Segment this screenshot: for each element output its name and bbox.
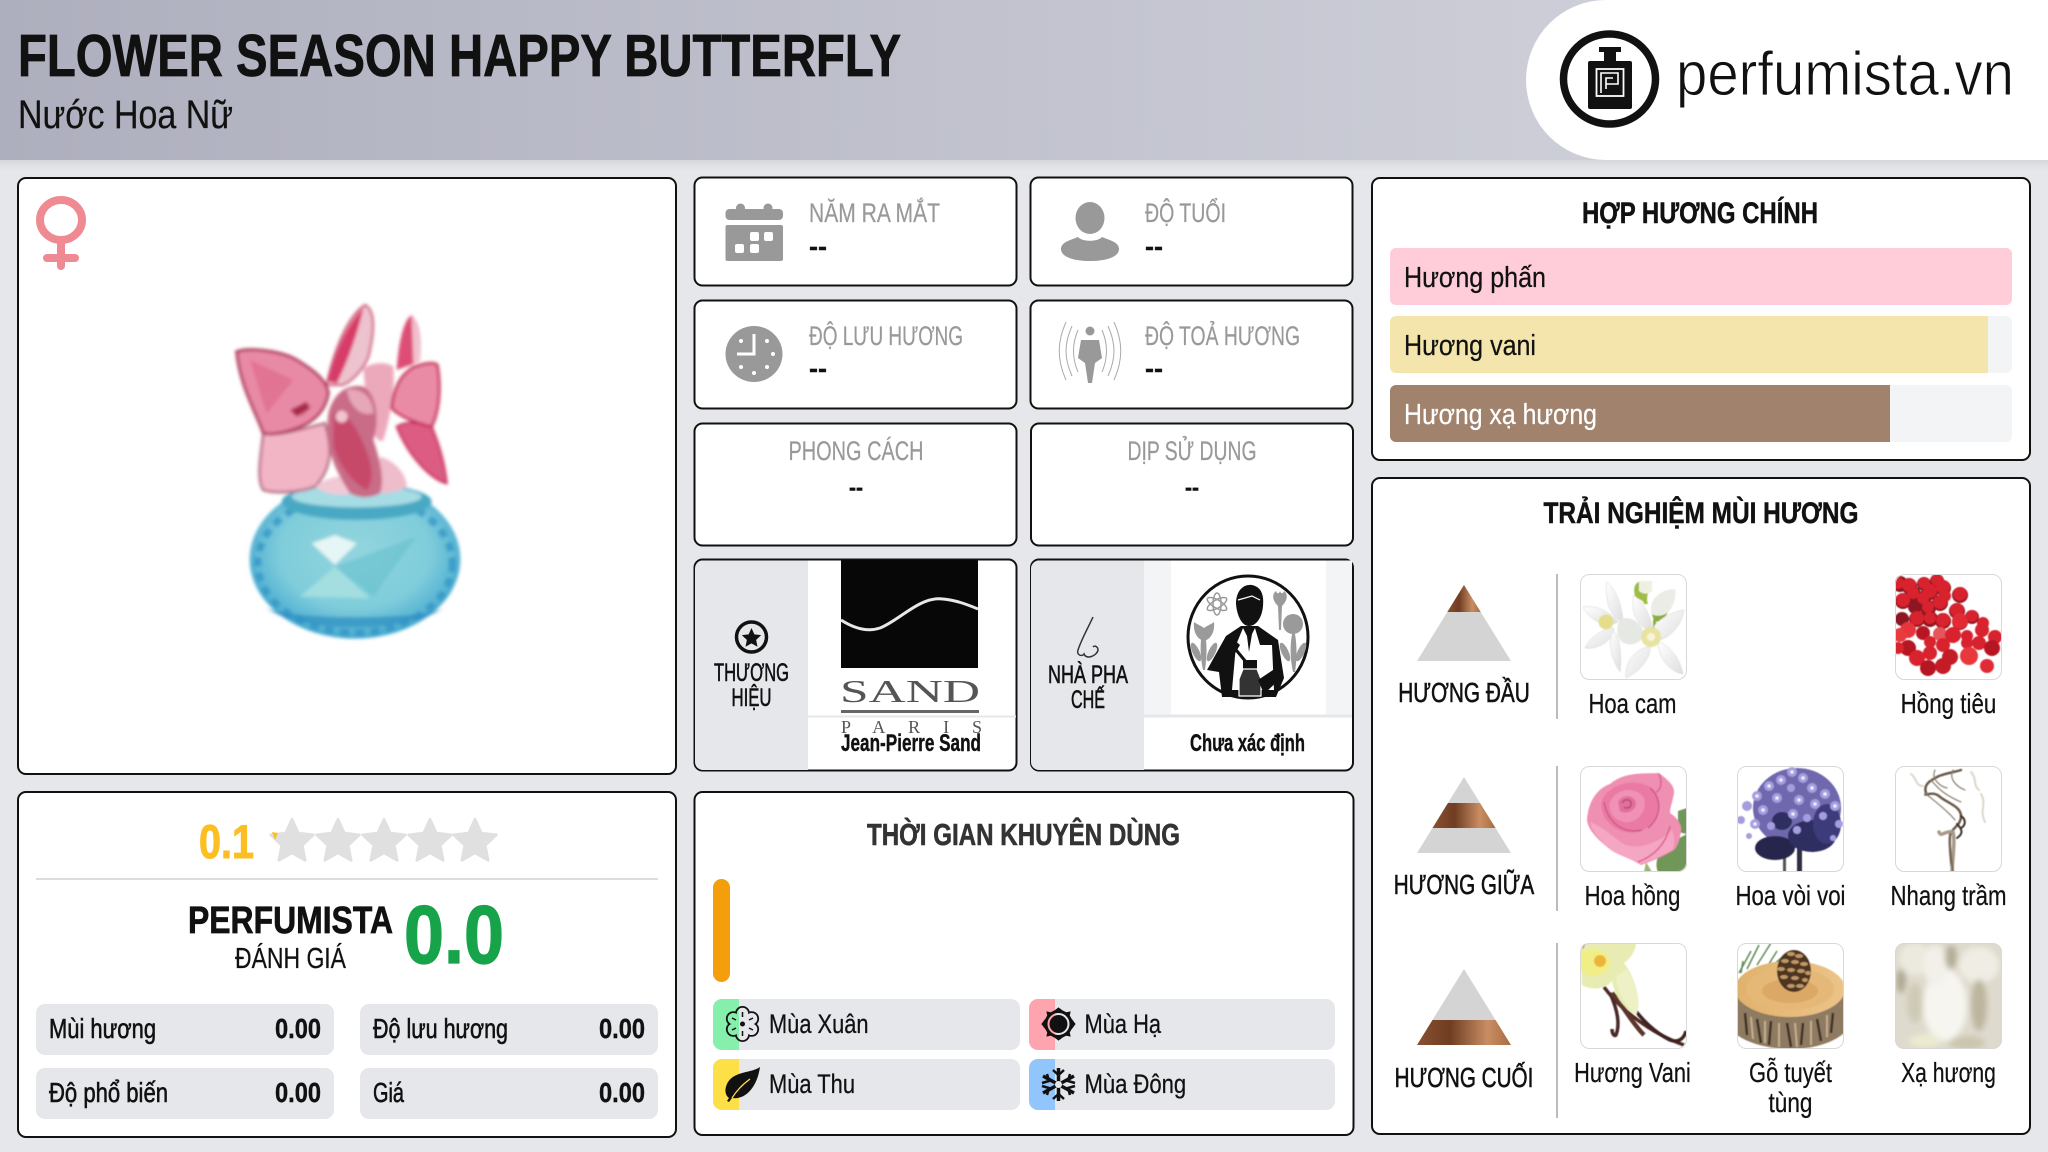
score: Độ lưu hương bbox=[360, 1004, 658, 1055]
icon: aroma person bbox=[1059, 322, 1121, 383]
middle notes label: HƯƠNG GIỮA bbox=[1394, 869, 1534, 900]
ingredient: Hương Vani: Hương Vani bbox=[1574, 1057, 1691, 1088]
label: perfumer: NHÀ PHA bbox=[1048, 660, 1128, 689]
accord bar: Hương phấn bbox=[1390, 248, 2012, 305]
label: Perfumista rating: PERFUMISTA bbox=[188, 900, 393, 942]
ingredient: Hoa vòi voi bbox=[1736, 766, 1846, 911]
card: age: -- bbox=[1145, 231, 1163, 261]
top notes label: HƯƠNG ĐẦU bbox=[1398, 677, 1530, 708]
icon: nose bbox=[1078, 617, 1098, 657]
panel: recommended time bbox=[694, 792, 1354, 1135]
ingredient: Hương Vani bbox=[1574, 943, 1691, 1088]
panel: main accords bbox=[1372, 178, 2030, 460]
accord bar: Hương vani: Hương vani bbox=[1404, 330, 1536, 362]
icon: person bbox=[1061, 202, 1119, 261]
ingredient: Nhang trầm: Nhang trầm bbox=[1890, 880, 2006, 911]
label: perfumer: CHẾ bbox=[1071, 685, 1105, 714]
ingredient: Xạ hương: Xạ hương bbox=[1901, 1057, 1996, 1088]
card: style: -- bbox=[849, 475, 863, 500]
score: Giá: 0.00 bbox=[599, 1077, 645, 1108]
score: Độ phổ biến bbox=[36, 1068, 334, 1119]
middle notes label bbox=[1394, 777, 1534, 900]
header band bbox=[0, 0, 2048, 170]
score: Độ phổ biến: 0.00 bbox=[275, 1077, 321, 1108]
score: Giá: Giá bbox=[373, 1077, 404, 1108]
icon: clock bbox=[726, 326, 782, 382]
ingredient: Hoa cam bbox=[1580, 574, 1687, 719]
perfumer illustration bbox=[1188, 576, 1308, 698]
label: perfumer bbox=[1048, 660, 1128, 714]
label: brand bbox=[714, 659, 789, 712]
season: winter: Mùa Đông bbox=[1084, 1069, 1186, 1099]
accord bar: Hương phấn: Hương phấn bbox=[1404, 262, 1546, 294]
brand logo: Sand Paris bbox=[840, 560, 982, 737]
title: FLOWER SEASON HAPPY BUTTERFLY bbox=[18, 23, 901, 89]
card: occasion: DỊP SỬ DỤNG bbox=[1128, 434, 1256, 466]
heading: THỜI GIAN KHUYÊN DÙNG bbox=[867, 816, 1180, 852]
card: age bbox=[1030, 178, 1352, 286]
season: summer bbox=[1029, 999, 1335, 1050]
card: release year bbox=[694, 178, 1016, 286]
ingredient: Gỗ tuyết tùng bbox=[1735, 943, 1845, 1118]
score: Giá bbox=[360, 1068, 658, 1119]
logo: perfumista.vn bbox=[1526, 0, 2048, 160]
card: longevity bbox=[694, 300, 1016, 408]
card: longevity: ĐỘ LƯU HƯƠNG bbox=[809, 320, 963, 351]
heading: HỢP HƯƠNG CHÍNH bbox=[1582, 196, 1818, 230]
label: brand: HIỆU bbox=[732, 683, 772, 712]
card: projection bbox=[1030, 300, 1352, 408]
icon: perfume bottle in ring bbox=[1564, 34, 1656, 124]
card: release year: NĂM RA MẮT bbox=[809, 197, 940, 228]
Perfumista score: 0.0 bbox=[404, 888, 504, 981]
card: occasion: -- bbox=[1185, 475, 1199, 500]
ingredient: Xạ hương bbox=[1895, 943, 2002, 1088]
ingredient: Nhang trầm bbox=[1890, 766, 2006, 911]
bar: day/night indicator bbox=[713, 879, 730, 982]
card: style: PHONG CÁCH bbox=[788, 436, 924, 466]
user rating score: 0.1 bbox=[199, 815, 254, 868]
card: occasion bbox=[1031, 424, 1353, 546]
season: summer: Mùa Hạ bbox=[1084, 1009, 1162, 1039]
card: release year: -- bbox=[809, 231, 827, 261]
accord bar: Hương xạ hương: Hương xạ hương bbox=[1404, 399, 1597, 431]
ingredient: Hoa hồng: Hoa hồng bbox=[1585, 880, 1680, 911]
season: spring bbox=[713, 999, 1020, 1050]
score: Mùi hương: 0.00 bbox=[275, 1013, 321, 1044]
score: Mùi hương bbox=[36, 1004, 334, 1055]
base notes label: HƯƠNG CUỐI bbox=[1395, 1061, 1533, 1093]
logo wordmark: perfumista.vn bbox=[1676, 40, 2014, 109]
card: style bbox=[694, 424, 1016, 546]
score: Độ phổ biến: Độ phổ biến bbox=[49, 1077, 168, 1108]
perfumer name: Chưa xác định bbox=[1190, 730, 1305, 757]
top notes label bbox=[1398, 585, 1530, 708]
card: projection: ĐỘ TOẢ HƯƠNG bbox=[1145, 319, 1300, 351]
label: Perfumista rating: ĐÁNH GIÁ bbox=[235, 942, 347, 975]
brand logo: Sand Paris: PARIS bbox=[841, 717, 982, 737]
season: winter bbox=[1029, 1059, 1335, 1110]
heading: TRẢI NGHIỆM MÙI HƯƠNG bbox=[1544, 496, 1858, 530]
brand name: Jean-Pierre Sand bbox=[841, 730, 981, 757]
icon: star badge bbox=[736, 622, 766, 652]
season: spring: Mùa Xuân bbox=[769, 1009, 868, 1039]
icon: female symbol bbox=[40, 200, 82, 266]
season: autumn: Mùa Thu bbox=[769, 1069, 855, 1099]
card: brand bbox=[694, 560, 1016, 770]
score: Độ lưu hương: Độ lưu hương bbox=[373, 1013, 508, 1044]
panel: rating bbox=[18, 792, 676, 1137]
score: Độ lưu hương: 0.00 bbox=[599, 1013, 645, 1044]
ingredient: Hoa cam: Hoa cam bbox=[1588, 688, 1676, 719]
brand logo: Sand Paris: SAND bbox=[840, 673, 980, 709]
score: Mùi hương: Mùi hương bbox=[49, 1013, 156, 1044]
label: brand: THƯƠNG bbox=[714, 659, 789, 687]
label: Perfumista rating bbox=[188, 900, 393, 975]
card: longevity: -- bbox=[809, 353, 827, 383]
rating stars bbox=[270, 819, 496, 860]
panel: product image bbox=[18, 178, 676, 774]
ingredient: Hoa hồng bbox=[1580, 766, 1687, 911]
card: age: ĐỘ TUỔI bbox=[1145, 197, 1226, 228]
subtitle: Nước Hoa Nữ bbox=[18, 93, 233, 137]
ingredient: Gỗ tuyết tùng: tùng bbox=[1768, 1087, 1812, 1118]
ingredient: Gỗ tuyết tùng: Gỗ tuyết bbox=[1749, 1057, 1832, 1088]
ingredient: Hồng tiêu bbox=[1892, 574, 2002, 719]
accord bar: Hương xạ hương bbox=[1390, 385, 2012, 442]
card: perfumer bbox=[1031, 560, 1353, 770]
ingredient: Hồng tiêu: Hồng tiêu bbox=[1901, 688, 1996, 719]
icon: calendar bbox=[726, 204, 783, 261]
panel: scent experience bbox=[1372, 478, 2030, 1134]
base notes label bbox=[1395, 969, 1533, 1093]
product photo: butterfly bottle bbox=[237, 305, 460, 639]
season: autumn bbox=[713, 1059, 1020, 1110]
ingredient: Hoa vòi voi: Hoa vòi voi bbox=[1736, 880, 1846, 911]
accord bar: Hương vani bbox=[1390, 316, 2012, 373]
card: projection: -- bbox=[1145, 353, 1163, 383]
